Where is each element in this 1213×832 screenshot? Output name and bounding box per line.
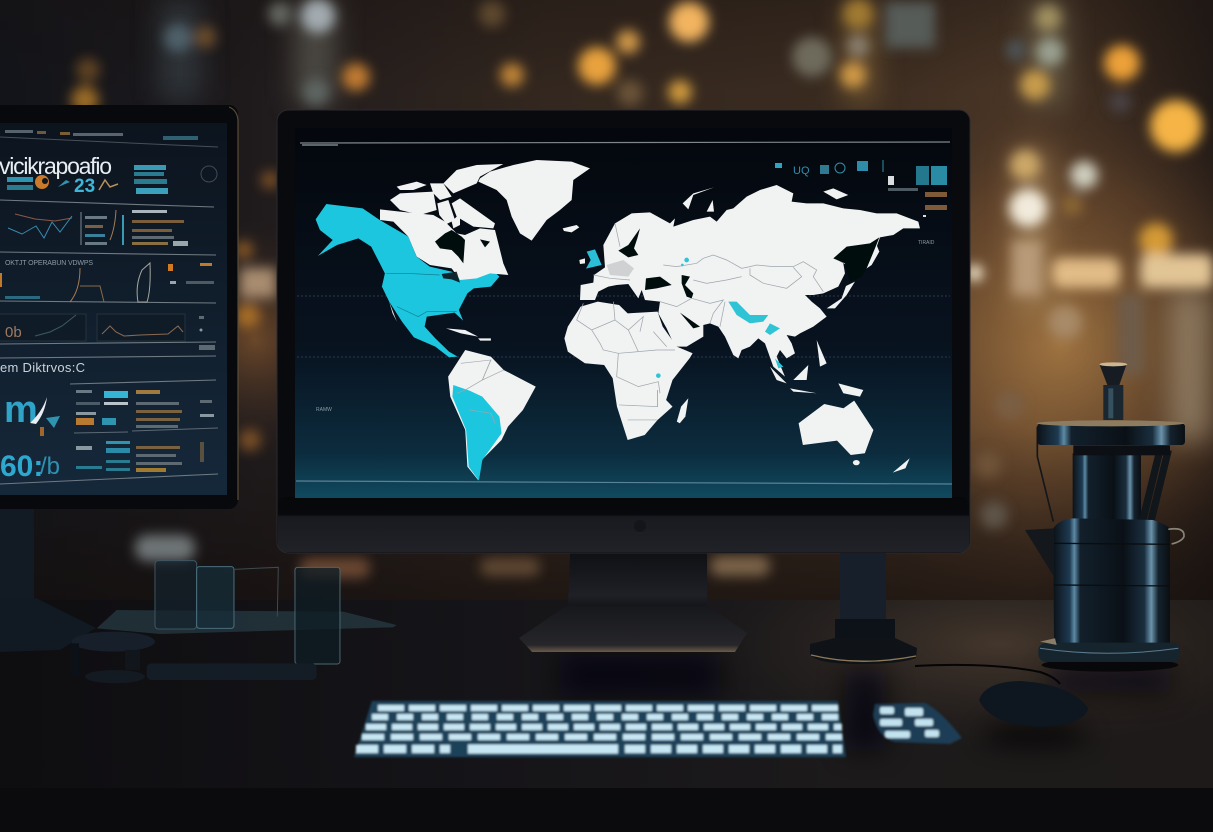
knob and shaft xyxy=(1099,362,1127,420)
screen header rule xyxy=(300,142,950,146)
left screen line chart xyxy=(8,210,188,246)
body xyxy=(1025,518,1184,647)
screen top-right mini dashboard: TIRAID xyxy=(918,240,935,246)
map: country borders xyxy=(577,223,823,393)
keyboard rows xyxy=(356,708,842,749)
map: Greenland and Canada xyxy=(380,160,590,283)
map: Asia highlights xyxy=(656,258,783,378)
cable xyxy=(915,665,1060,684)
left screen chart caption: OKTJT OPERABUN VDWPS xyxy=(5,260,93,267)
main monitor xyxy=(277,110,970,652)
left screen section rules xyxy=(0,200,218,484)
map: Madagascar xyxy=(677,398,688,423)
map: Kamchatka and Japan xyxy=(827,245,879,308)
map: Iceland xyxy=(563,225,579,232)
top disk xyxy=(1037,420,1185,455)
left screen icons row: 23 xyxy=(74,176,95,197)
dark puck stand xyxy=(71,632,155,683)
mouse xyxy=(979,681,1090,747)
blurred city bokeh background xyxy=(0,0,1213,610)
main monitor screen xyxy=(295,128,952,498)
screen top-right mini dashboard: UQ xyxy=(793,165,810,177)
left screen curve chart xyxy=(0,263,214,302)
map: Hudson Bay xyxy=(435,230,465,263)
bottom rule xyxy=(296,481,952,484)
stand shadows xyxy=(560,655,1170,750)
left screen data blocks xyxy=(74,390,218,472)
wire handle left xyxy=(1037,427,1053,522)
grinder shadow xyxy=(1042,658,1178,672)
phone or remote xyxy=(147,663,317,680)
coffee grinder xyxy=(1025,362,1185,672)
left screen small charts xyxy=(0,314,215,350)
dotted latitude lines xyxy=(297,296,950,357)
map: United States, Alaska and Mexico xyxy=(316,204,499,357)
map: Great Lakes xyxy=(442,272,460,283)
map: British Isles xyxy=(579,249,602,269)
left screen header xyxy=(0,130,218,147)
left screen small charts: 0b xyxy=(5,324,22,341)
main monitor bezel xyxy=(277,110,970,553)
glassware tray xyxy=(71,561,397,683)
map: Canadian Arctic islands xyxy=(390,164,503,228)
map: Americas, Africa, Oceania xyxy=(316,204,910,481)
map: Central Europe shading xyxy=(607,260,634,277)
screen top-right mini dashboard xyxy=(775,160,947,246)
left screen section heading: em Diktrvos:C xyxy=(0,360,85,375)
glass 3 xyxy=(234,567,278,617)
map: Novaya Zemlya and Arctic xyxy=(683,187,848,212)
desk surface xyxy=(0,600,1213,832)
map: Southeast Asia islands xyxy=(770,340,863,397)
left monitor stand xyxy=(0,508,96,652)
map: Eurasia xyxy=(577,185,920,397)
second monitor arm on the desk xyxy=(810,553,917,664)
glass 4 xyxy=(295,567,340,664)
left screen big teal glyphs: m xyxy=(4,389,38,431)
logo on chin xyxy=(634,520,646,532)
left screen title: vicikrapoafio xyxy=(0,153,112,179)
map: Eurasia landmass xyxy=(580,185,920,377)
left map caption: RAMW xyxy=(316,407,332,413)
left screen big teal glyphs: /b xyxy=(40,453,60,480)
left screen big teal glyphs: 60: xyxy=(0,450,43,483)
map: Canada mainland xyxy=(380,209,508,280)
map: South American borders xyxy=(457,360,658,423)
glass 2 xyxy=(197,567,234,628)
tray xyxy=(97,610,397,634)
left screen big teal glyphs xyxy=(0,389,60,483)
base ring xyxy=(1038,638,1180,662)
map: Greenland xyxy=(478,160,590,241)
map: Australia xyxy=(799,401,873,455)
left screen side stats xyxy=(134,165,217,194)
left monitor xyxy=(0,105,238,652)
map: Africa xyxy=(564,302,693,440)
column xyxy=(1073,453,1141,522)
map: South America xyxy=(448,350,536,480)
main monitor stand xyxy=(519,552,747,652)
world map xyxy=(316,160,920,481)
left screen icons row xyxy=(7,175,118,197)
map: Caribbean islands xyxy=(446,328,491,341)
keyboard xyxy=(354,701,846,757)
glass 1 xyxy=(155,561,197,629)
numeric keypad xyxy=(873,703,962,744)
legs xyxy=(1142,450,1168,525)
map: New Zealand and Tasmania xyxy=(853,458,910,473)
map: Okhotsk and Baltic water xyxy=(618,228,879,328)
